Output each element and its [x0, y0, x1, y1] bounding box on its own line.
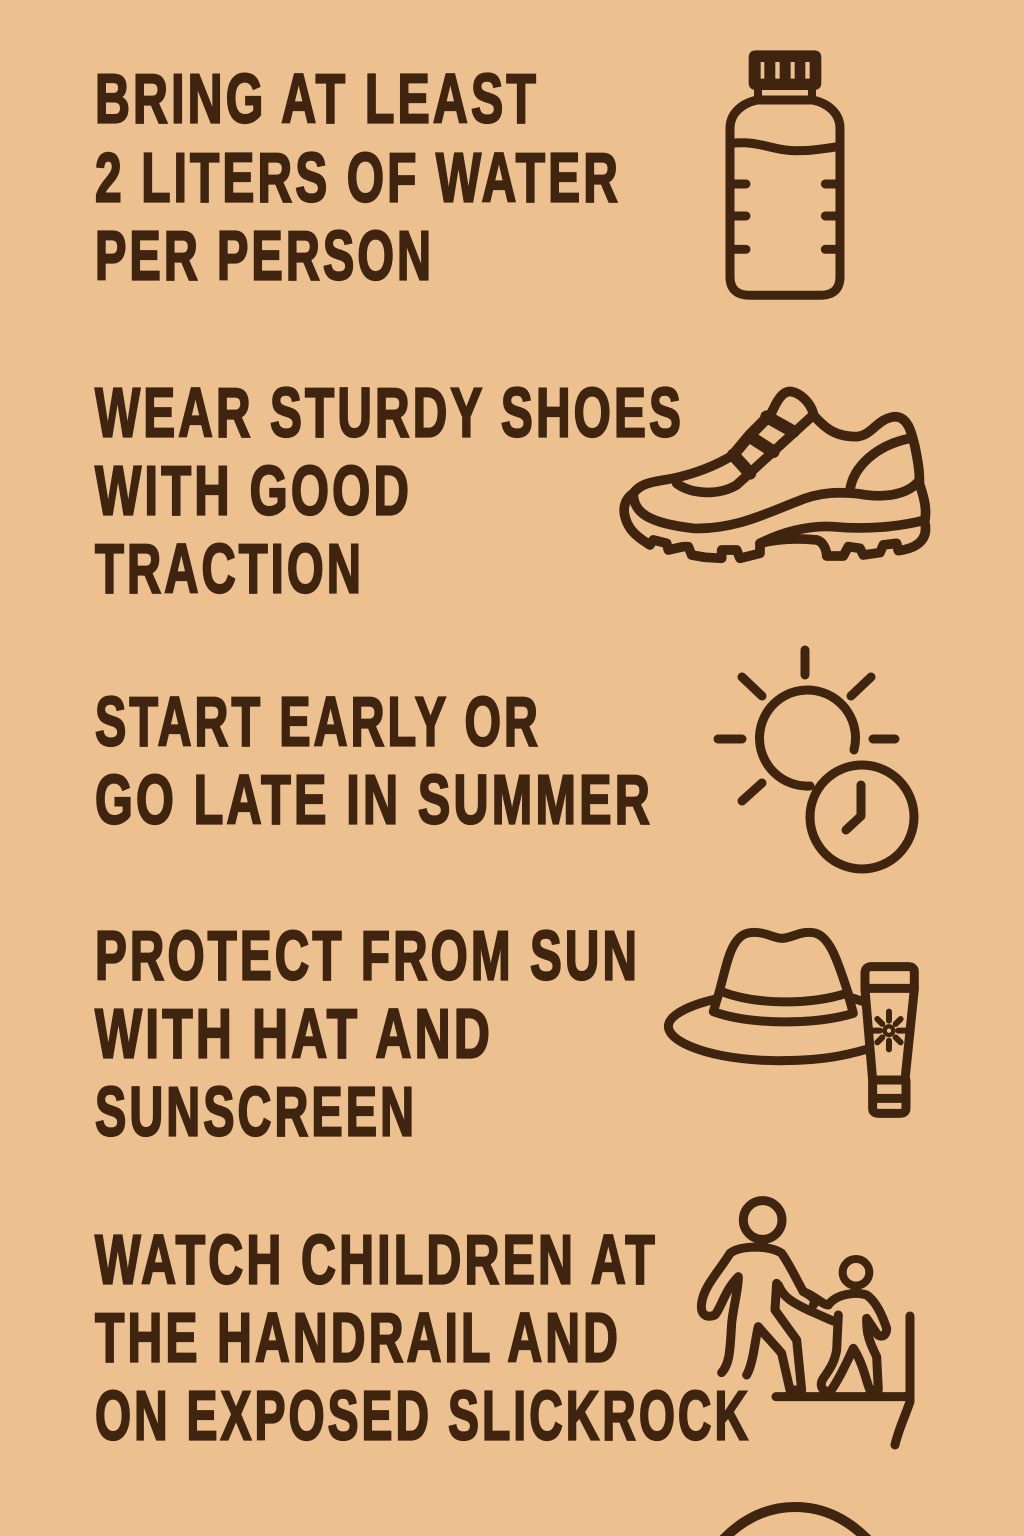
heading: sun protection [95, 916, 640, 1150]
heading: shoes: WEAR STURDY SHOES [95, 374, 684, 452]
heading: water: 2 LITERS OF WATER [95, 138, 621, 216]
panel: sun protection tip [95, 916, 914, 1150]
panel: shoes tip [95, 374, 926, 608]
heading: children [95, 1220, 751, 1454]
heading: sun protection: PROTECT FROM SUN [95, 916, 640, 994]
heading: sun protection: WITH HAT AND [95, 994, 493, 1072]
heading: timing: START EARLY OR [95, 682, 541, 760]
heading: sun protection: SUNSCREEN [95, 1072, 417, 1150]
heading: shoes: TRACTION [95, 530, 364, 608]
icon: hiking shoe [624, 391, 926, 558]
icon: adult and child at handrail [701, 1201, 910, 1445]
heading: timing [95, 682, 653, 838]
heading: children: WATCH CHILDREN AT [95, 1220, 658, 1298]
heading: water [95, 60, 621, 294]
icon: sun and clock [718, 650, 914, 869]
icon: hat and sunscreen [668, 932, 914, 1113]
heading: water: BRING AT LEAST [95, 60, 539, 138]
heading: children: THE HANDRAIL AND [95, 1298, 621, 1376]
icon: water bottle [730, 52, 840, 295]
heading: shoes: WITH GOOD [95, 452, 412, 530]
panel: children tip [95, 1201, 910, 1454]
icon: partially cropped circle [718, 1507, 873, 1536]
panel: water tip [95, 52, 840, 295]
heading: timing: GO LATE IN SUMMER [95, 760, 653, 838]
heading: water: PER PERSON [95, 216, 434, 294]
panel: timing tip [95, 650, 914, 869]
heading: shoes [95, 374, 684, 608]
